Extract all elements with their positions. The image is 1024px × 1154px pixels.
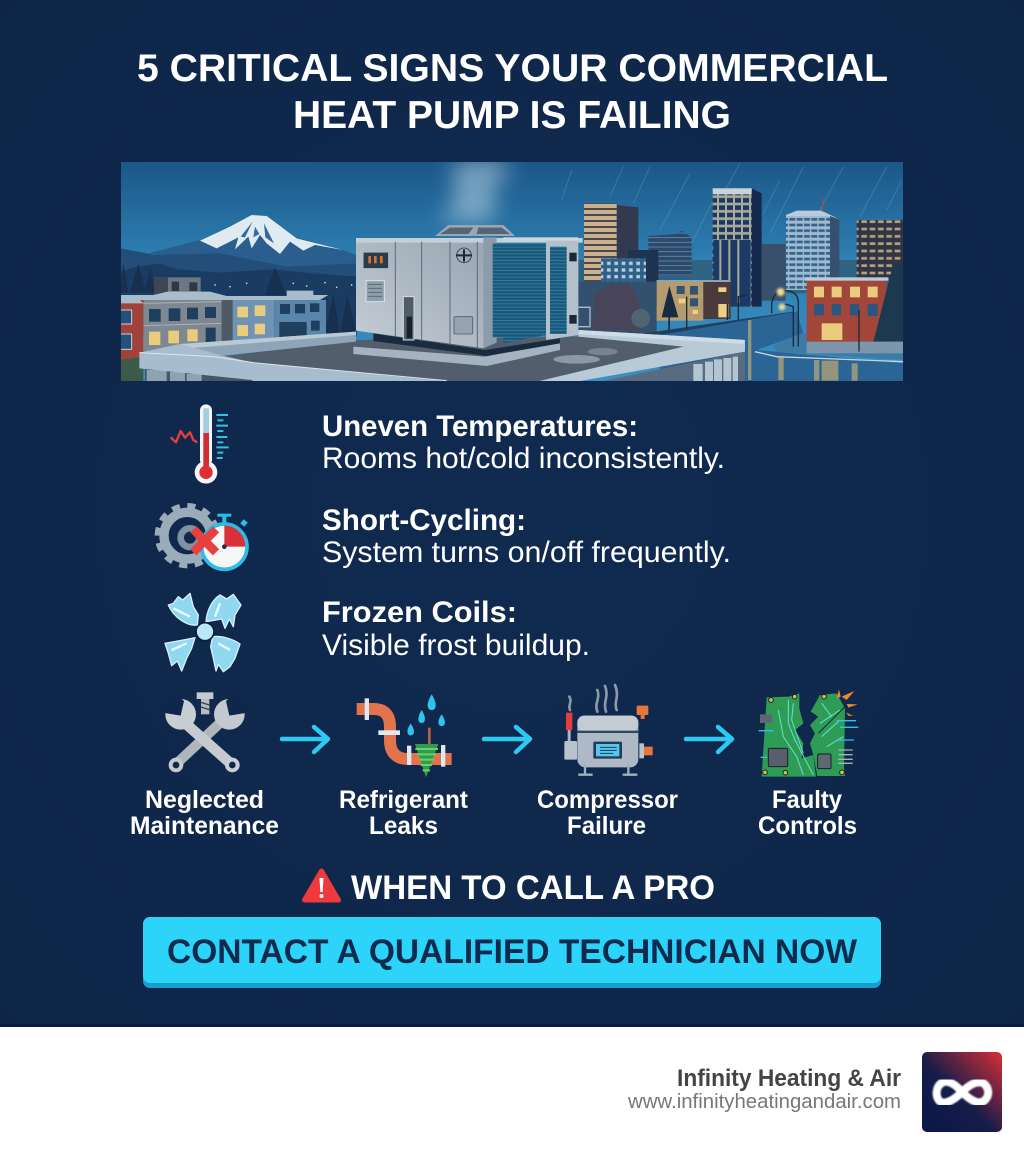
text: frozen coils xyxy=(322,596,590,662)
label: refrigerant leaks xyxy=(339,786,469,840)
text: frozen coils: Visible frost buildup. xyxy=(322,629,590,662)
text: uneven temperatures: Uneven Temperatures: xyxy=(322,410,638,443)
sign 3: frozen coils xyxy=(165,593,590,672)
title: 5 CRITICAL SIGNS YOUR COMMERCIAL xyxy=(137,47,888,90)
label: refrigerant leaks: Leaks xyxy=(369,812,438,840)
icon: overheating compressor xyxy=(564,685,653,775)
label: faulty controls xyxy=(758,786,857,840)
call to action button xyxy=(143,917,881,988)
arrow 2 xyxy=(484,727,530,752)
sign 2: short-cycling xyxy=(158,504,731,569)
icon: leaking pipe with valve xyxy=(357,694,452,777)
call to action button: CONTACT A QUALIFIED TECHNICIAN NOW xyxy=(167,933,858,971)
cause 2: refrigerant leaks xyxy=(339,694,469,840)
steam plume xyxy=(440,159,510,223)
label: compressor failure: Compressor xyxy=(537,786,678,814)
arrow 1 xyxy=(282,727,328,752)
cause 4: faulty controls xyxy=(758,689,858,840)
icon: thermometer xyxy=(171,404,229,484)
footer website: www.infinityheatingandair.com xyxy=(627,1091,901,1113)
text: short-cycling: Short-Cycling: xyxy=(322,504,526,537)
sign 1: uneven temperatures xyxy=(171,404,725,484)
hero illustration: rooftop heat pump in a rainy city xyxy=(120,159,903,383)
text: frozen coils: Frozen Coils: xyxy=(322,596,517,629)
label: refrigerant leaks: Refrigerant xyxy=(339,786,469,814)
icon: gear with stopwatch and red cross xyxy=(158,506,248,569)
label: neglected maintenance: Neglected xyxy=(145,786,264,814)
text: uneven temperatures xyxy=(322,410,725,475)
text: short-cycling: System turns on/off frequently. xyxy=(322,536,731,569)
label: faulty controls: Faulty xyxy=(772,786,842,814)
icon: warning triangle xyxy=(304,871,338,900)
footer brand name: Infinity Heating & Air xyxy=(677,1065,901,1092)
label: neglected maintenance xyxy=(130,786,279,840)
right city skyline and wet street xyxy=(562,163,903,382)
text: uneven temperatures: Rooms hot/cold inconsistently. xyxy=(322,442,725,475)
text: when to call a pro: WHEN TO CALL A PRO xyxy=(351,869,715,907)
heat pump unit xyxy=(353,225,583,366)
label: faulty controls: Controls xyxy=(758,812,857,840)
footer xyxy=(0,1024,1024,1154)
icon: frozen fan xyxy=(165,593,241,672)
label: neglected maintenance: Maintenance xyxy=(130,812,279,840)
text: short-cycling xyxy=(322,504,731,569)
cause 1: neglected maintenance xyxy=(130,692,279,840)
icon: crossed wrenches and bolt xyxy=(160,692,250,772)
logo: infinity mark xyxy=(922,1052,1002,1132)
label: compressor failure: Failure xyxy=(567,812,646,840)
title: HEAT PUMP IS FAILING xyxy=(293,94,731,137)
rooftop and parapet xyxy=(139,332,683,383)
title xyxy=(137,47,888,137)
arrow 3 xyxy=(686,727,732,752)
icon: cracked circuit board xyxy=(759,689,858,777)
left landscape and buildings xyxy=(120,215,357,382)
warning heading xyxy=(304,869,715,907)
label: compressor failure xyxy=(537,786,678,840)
cause 3: compressor failure xyxy=(537,685,678,840)
